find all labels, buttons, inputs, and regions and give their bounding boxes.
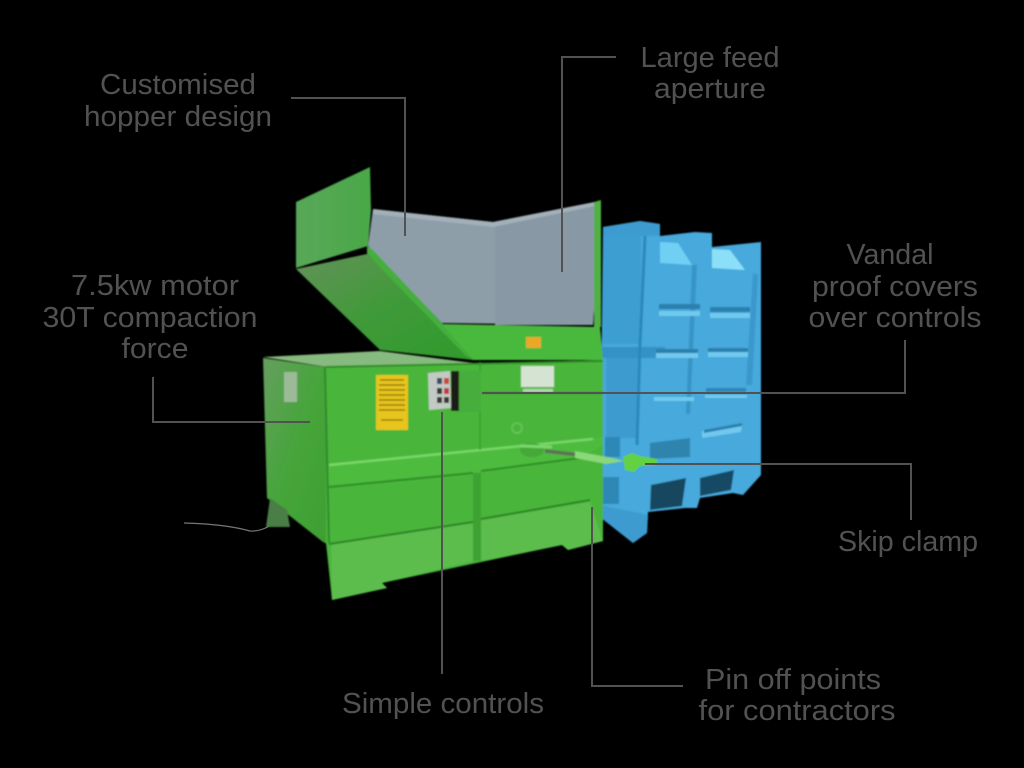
compactor and skip illustration bbox=[263, 167, 761, 600]
right green edge bbox=[594, 200, 601, 327]
skip clamp bbox=[512, 423, 657, 472]
control box bbox=[428, 371, 481, 412]
callout: large feed aperture: aperture bbox=[654, 73, 766, 105]
callout: vandal proof covers: proof covers bbox=[812, 271, 978, 303]
flap bbox=[296, 167, 371, 268]
callout: motor and compaction force: force bbox=[122, 333, 188, 365]
side feet bbox=[266, 498, 290, 527]
callout: motor and compaction force: 7.5kw motor bbox=[71, 270, 239, 302]
skip door column bbox=[600, 221, 665, 543]
lower panels bbox=[331, 522, 473, 600]
callout: vandal proof covers: over controls bbox=[808, 302, 982, 334]
skip ribs and pressings bbox=[650, 265, 758, 510]
body front bbox=[326, 360, 603, 600]
callout: pin off points: for contractors bbox=[698, 695, 896, 727]
callout: pin off points: Pin off points bbox=[705, 664, 881, 696]
body side bbox=[263, 358, 329, 545]
front cross beam bbox=[328, 437, 603, 487]
grey inner wall bbox=[368, 201, 600, 325]
callout: customised hopper design: hopper design bbox=[84, 101, 272, 133]
callout: vandal proof covers bbox=[482, 239, 982, 393]
front band bbox=[442, 324, 603, 360]
callout: customised hopper design: Customised bbox=[100, 69, 256, 101]
skip container bbox=[600, 221, 761, 543]
callout: skip clamp: Skip clamp bbox=[838, 526, 978, 558]
callout: customised hopper design bbox=[84, 69, 405, 236]
callout: large feed aperture: Large feed bbox=[640, 42, 780, 74]
callout: large feed aperture bbox=[562, 42, 780, 272]
callout: motor and compaction force: 30T compaction bbox=[42, 302, 258, 334]
callout: vandal proof covers: Vandal bbox=[846, 239, 934, 271]
callout: simple controls: Simple controls bbox=[342, 688, 544, 720]
small yellow label bbox=[526, 337, 541, 348]
side label bbox=[284, 372, 297, 402]
vertical post bbox=[473, 473, 481, 561]
callout: skip clamp bbox=[645, 464, 978, 558]
upper rail bbox=[326, 361, 603, 393]
compactor main body bbox=[263, 351, 603, 600]
underside bbox=[296, 254, 473, 360]
callout: motor and compaction force bbox=[42, 270, 310, 422]
hopper bbox=[296, 167, 603, 360]
body top bbox=[263, 351, 473, 367]
warning sign bbox=[376, 375, 408, 430]
skip lid highlights bbox=[660, 242, 745, 270]
white notice plate bbox=[521, 366, 554, 392]
callout: pin off points bbox=[592, 507, 896, 727]
power cable bbox=[184, 516, 282, 531]
